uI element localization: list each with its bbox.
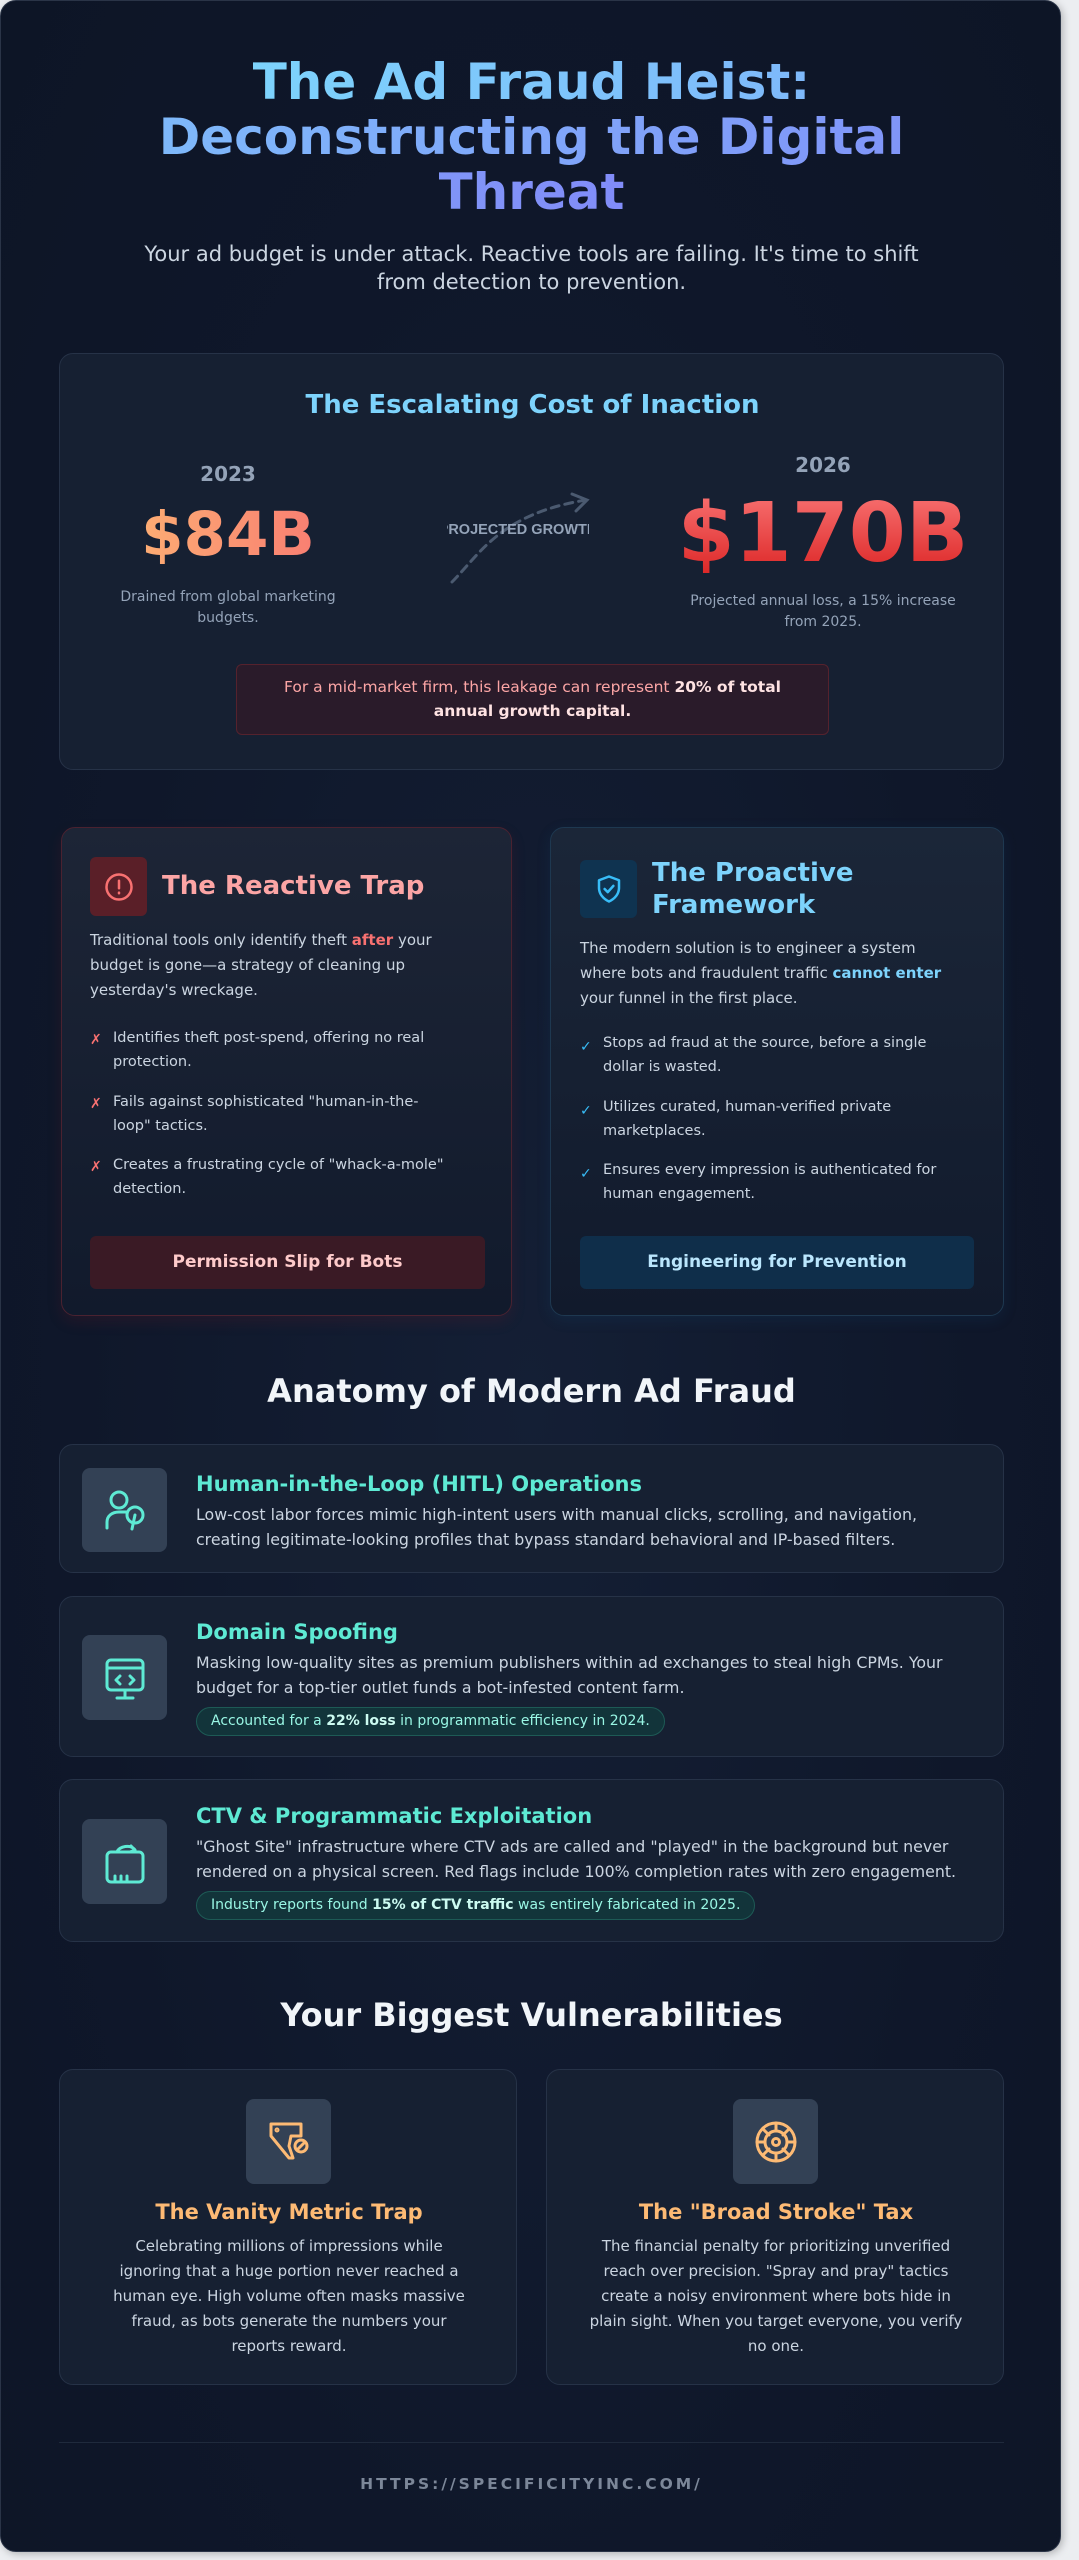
button (580, 1236, 974, 1289)
list: ✗ (90, 1096, 102, 1112)
panel: escalating cost (59, 353, 1004, 770)
list: ✗ (90, 1032, 102, 1048)
panel: reactive trap: detection. (113, 1181, 186, 1197)
description: create a noisy environment where bots hide in (601, 2287, 951, 2305)
description (113, 2237, 465, 2355)
heading: The Reactive Trap (162, 871, 424, 901)
description: human eye. High volume often masks massive (113, 2287, 465, 2305)
list: Utilizes curated, human-verified private (603, 1099, 891, 1115)
description (196, 1653, 943, 1697)
panel: proactive framework (550, 827, 1004, 1316)
icon: user (82, 1468, 167, 1552)
title: The Vanity Metric Trap (155, 2200, 423, 2224)
stat: 2026 (678, 453, 968, 630)
description: fraud, as bots generate the numbers your (131, 2312, 447, 2330)
badge (196, 1707, 665, 1736)
card: vanity metric (59, 2069, 517, 2385)
badge: Industry reports found 15% of CTV traffic was entirely fabricated in 2025. (211, 1897, 740, 1913)
subtitle: Your ad budget is under attack. Reactive tools are failing. It's time to shift (144, 242, 919, 266)
title: Domain Spoofing (196, 1620, 398, 1644)
list: Stops ad fraud at the source, before a single (603, 1035, 926, 1051)
list: Ensures every impression is authenticated for (603, 1162, 936, 1178)
button: Engineering for Prevention (647, 1252, 907, 1272)
list: protection. (113, 1054, 192, 1070)
description: reports reward. (231, 2337, 347, 2355)
description: Low-cost labor forces mimic high-intent users with manual clicks, scrolling, and navigation, (196, 1505, 917, 1524)
heading: Framework (652, 890, 815, 920)
title: The "Broad Stroke" Tax (639, 2200, 913, 2224)
heading: anatomy: Anatomy of Modern Ad Fraud (267, 1372, 796, 1410)
list (90, 1030, 444, 1197)
text: your funnel in the first place. (580, 989, 798, 1007)
text: budget is gone—a strategy of cleaning up (90, 956, 405, 974)
list: ✓ (580, 1103, 592, 1119)
description: reach over precision. "Spray and pray" tactics (604, 2262, 948, 2280)
callout: annual growth capital. (434, 702, 631, 720)
stat: 2023: budgets. (197, 610, 259, 626)
text (90, 931, 432, 999)
text: The modern solution is to engineer a system (580, 939, 916, 957)
icon: shield (580, 860, 637, 918)
badge (196, 1891, 755, 1920)
panel: proactive framework: human engagement. (603, 1186, 755, 1202)
subtitle: from detection to prevention. (377, 270, 686, 294)
text: yesterday's wreckage. (90, 981, 258, 999)
subtitle (144, 242, 919, 294)
card: CTV (59, 1779, 1004, 1942)
panel: reactive trap (61, 827, 512, 1316)
description: "Ghost Site" infrastructure where CTV ads are called and "played" in the background but never (196, 1837, 948, 1856)
callout: For a mid-market firm, this leakage can represent 20% of total (284, 678, 781, 696)
heading (652, 858, 854, 920)
description: no one. (748, 2337, 804, 2355)
description: creating legitimate-looking profiles that bypass standard behavioral and IP-based filters. (196, 1530, 895, 1549)
description: ignoring that a huge portion never reached a (119, 2262, 459, 2280)
description: budget for a top-tier outlet funds a bot-infested content farm. (196, 1678, 684, 1697)
footer url: HTTPS://SPECIFICITYINC.COM/ (360, 2475, 703, 2493)
arrow: projected growth (447, 492, 590, 584)
icon: tag (246, 2099, 331, 2184)
text (580, 939, 942, 1007)
callout (236, 664, 829, 735)
stat: 2023: Drained from global marketing (120, 589, 336, 605)
icon: alert (90, 857, 147, 916)
panel heading: The Escalating Cost of Inaction (305, 390, 760, 420)
stat: 2023: $84B (141, 499, 315, 570)
title: Deconstructing the Digital (159, 108, 904, 166)
list: Creates a frustrating cycle of "whack-a-mole" (113, 1157, 444, 1173)
list: marketplaces. (603, 1123, 706, 1139)
list (580, 1035, 936, 1202)
list: Identifies theft post-spend, offering no real (113, 1030, 424, 1046)
stat: 2026: 2026 (795, 453, 851, 477)
heading: vulnerabilities: Your Biggest Vulnerabilities (280, 1996, 783, 2034)
stat: 2023 (120, 462, 336, 626)
icon: tv (82, 1819, 167, 1904)
text: Traditional tools only identify theft after your (90, 931, 432, 949)
description: The financial penalty for prioritizing unverified (602, 2237, 950, 2255)
title (159, 53, 904, 221)
list: ✓ (580, 1039, 592, 1055)
button: Permission Slip for Bots (173, 1252, 402, 1272)
heading: The Proactive (652, 858, 854, 888)
card: broad stroke (546, 2069, 1004, 2385)
badge: Accounted for a 22% loss in programmatic efficiency in 2024. (211, 1713, 650, 1729)
list: dollar is wasted. (603, 1059, 722, 1075)
text: where bots and fraudulent traffic cannot enter (580, 964, 941, 982)
title: The Ad Fraud Heist: (253, 53, 810, 111)
icon: monitor code (82, 1635, 167, 1720)
card: domain spoofing (59, 1596, 1004, 1757)
stat: 2023: 2023 (200, 462, 256, 486)
icon: target wheel (733, 2099, 818, 2184)
title: CTV & Programmatic Exploitation (196, 1804, 592, 1828)
button (90, 1236, 485, 1289)
description: plain sight. When you target everyone, you verify (590, 2312, 962, 2330)
stat: 2026: Projected annual loss, a 15% increase (690, 593, 956, 609)
stat: 2026: $170B (678, 486, 968, 581)
list: loop" tactics. (113, 1118, 208, 1134)
description (590, 2237, 962, 2355)
title: Threat (439, 163, 624, 221)
title: Human-in-the-Loop (HITL) Operations (196, 1472, 642, 1496)
description (196, 1505, 917, 1549)
description (196, 1837, 956, 1881)
list: ✓ (580, 1166, 592, 1182)
stat: 2026: from 2025. (784, 614, 862, 630)
description: Masking low-quality sites as premium publishers within ad exchanges to steal high CPMs. Your (196, 1653, 943, 1672)
description: Celebrating millions of impressions while (135, 2237, 443, 2255)
description: rendered on a physical screen. Red flags include 100% completion rates with zero engagement. (196, 1862, 956, 1881)
list: ✗ (90, 1159, 102, 1175)
card: HITL (59, 1444, 1004, 1573)
list: Fails against sophisticated "human-in-the- (113, 1094, 419, 1110)
